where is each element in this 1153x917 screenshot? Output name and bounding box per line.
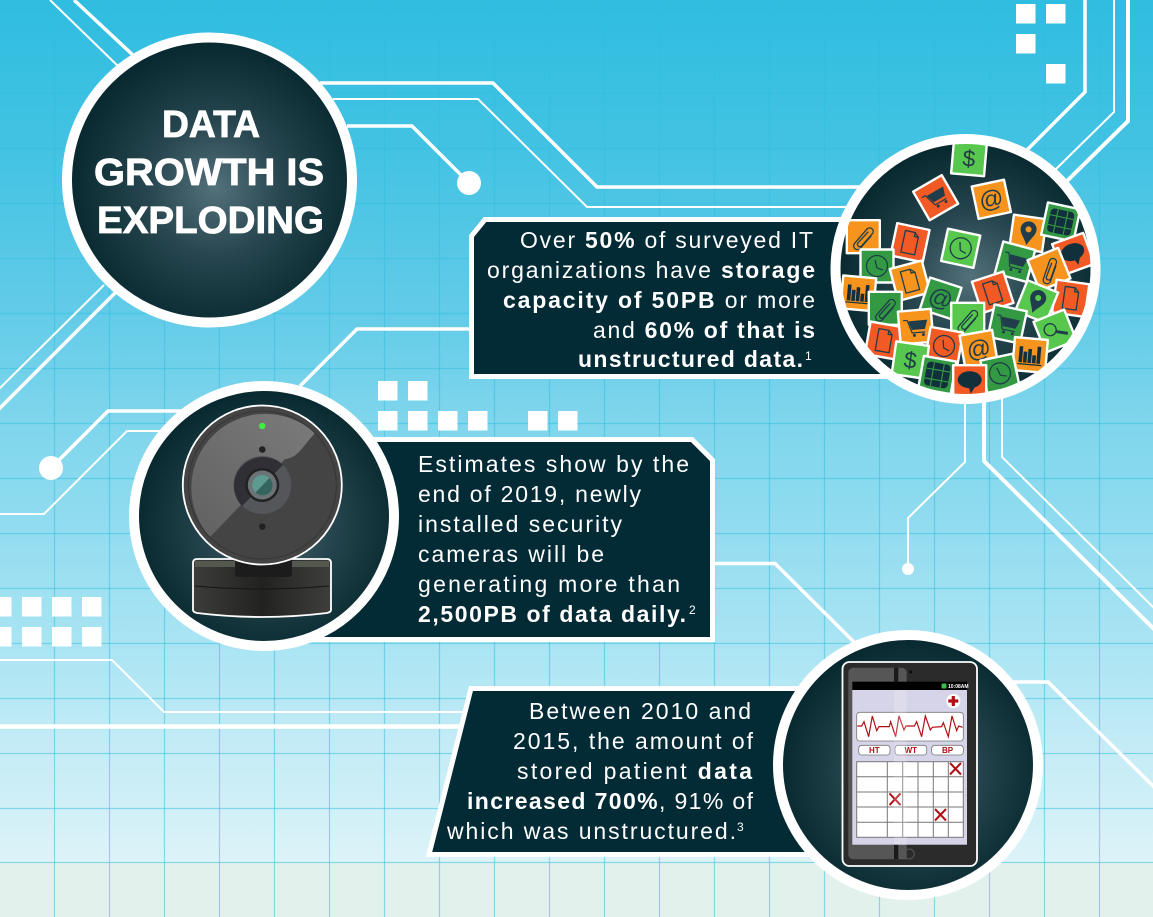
data tile circle — [836, 139, 1096, 399]
title badge — [67, 38, 352, 322]
icon tiles: @ — [964, 334, 993, 365]
text: patient data statistic: stored patient data — [517, 758, 752, 784]
square clusters — [0, 4, 1066, 646]
icon tiles — [840, 140, 1094, 398]
icon: medical tablet: HT — [869, 746, 880, 755]
title: EXPLODING — [97, 200, 324, 242]
title — [94, 104, 324, 242]
icon: medical tablet: WT — [905, 746, 917, 755]
data circle ring — [836, 139, 1096, 399]
icon tiles: @ — [977, 184, 1006, 216]
icon: medical tablet — [842, 662, 977, 866]
text: patient data statistic — [446, 698, 754, 844]
panel: storage capacity — [472, 220, 900, 376]
pale ground band — [0, 862, 1153, 917]
tablet circle — [778, 635, 1038, 895]
icon: medical tablet: BP — [942, 746, 954, 755]
text: storage statistic: capacity of 50PB or more — [503, 287, 815, 313]
icon: security camera — [183, 406, 342, 617]
text: patient data statistic: which was unstructured. — [446, 818, 736, 844]
text: camera statistic: end of 2019, newly — [418, 481, 642, 507]
text: camera statistic: cameras will be — [418, 541, 604, 567]
title: DATA — [162, 104, 260, 146]
text: patient data statistic: increased 700%, 91% of — [467, 788, 754, 814]
title: GROWTH IS — [94, 152, 324, 194]
text: patient data statistic: Between 2010 and — [529, 698, 751, 724]
text: storage statistic: and 60% of that is — [593, 317, 815, 343]
panel: security cameras — [300, 440, 712, 640]
text: camera statistic: generating more than — [418, 571, 680, 597]
text: patient data statistic: 3 — [737, 820, 744, 834]
icon tiles: $ — [902, 346, 919, 374]
text: camera statistic: Estimates show by the — [418, 451, 689, 477]
text: storage statistic: Over 50% of surveyed IT — [520, 227, 813, 253]
icon tiles: $ — [961, 145, 977, 172]
icon tiles: @ — [925, 282, 956, 315]
text: patient data statistic: 2015, the amount of — [513, 728, 754, 754]
text: storage statistic — [487, 227, 815, 372]
icon: medical tablet: 10:08AM — [948, 684, 969, 690]
text: storage statistic: unstructured data. — [578, 346, 803, 372]
trace end dots — [39, 171, 914, 575]
text: camera statistic: 2,500PB of data daily. — [418, 601, 686, 627]
text: storage statistic: 1 — [805, 349, 812, 363]
panel: patient data — [429, 688, 830, 854]
text: camera statistic: installed security — [418, 511, 622, 537]
text: camera statistic: 2 — [689, 603, 696, 617]
camera circle — [134, 386, 394, 646]
text: camera statistic — [418, 451, 696, 627]
text: storage statistic: organizations have storage — [487, 257, 815, 283]
